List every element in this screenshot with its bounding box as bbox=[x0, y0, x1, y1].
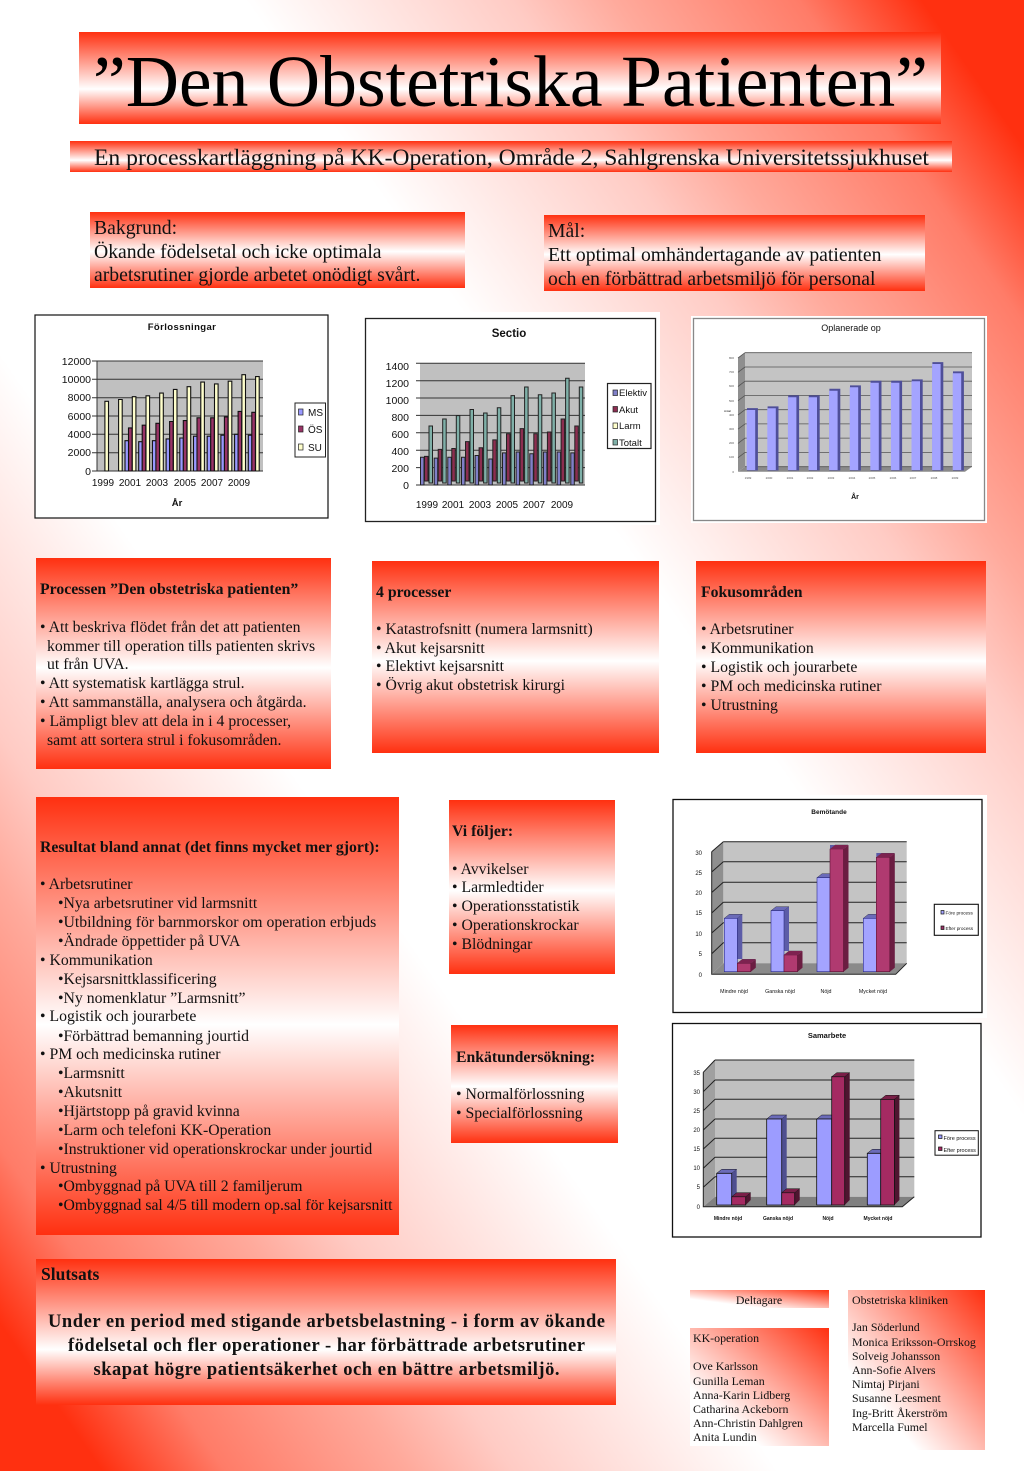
bar chart: Samarbete: 5 bbox=[697, 1185, 701, 1191]
panel: Slutsats: skapat högre patientsäkerhet och en bättre arbetsmiljö. bbox=[94, 1360, 560, 1380]
label: Deltagare: Deltagare bbox=[736, 1293, 782, 1307]
bar chart: Bemötande: 25 bbox=[695, 871, 703, 877]
panel: 4 processer: 4 processer bbox=[376, 584, 451, 601]
bar chart: Oplanerade op: 2004 bbox=[849, 476, 856, 480]
panel: Vi följer: • Blödningar bbox=[452, 936, 533, 953]
bar chart: Sectio: 200 bbox=[391, 463, 409, 475]
bar chart: Oplanerade op: 1999 bbox=[745, 476, 752, 480]
bar chart: Bemötande: 15 bbox=[695, 911, 703, 917]
bar chart: Bemötande: Efter process bbox=[946, 926, 974, 931]
bar chart: Förlossningar: 2003 bbox=[146, 478, 169, 489]
bar chart: Oplanerade op bbox=[691, 316, 987, 523]
bar chart: Bemötande: 5 bbox=[699, 952, 703, 958]
panel: KK-operation: Anita Lundin bbox=[693, 1430, 757, 1444]
panel: Processen: kommer till operation tills patienten skrivs bbox=[47, 638, 315, 655]
bar chart: Bemötande: Ganska nöjd bbox=[765, 989, 795, 995]
bar chart: Samarbete: Samarbete bbox=[808, 1031, 846, 1040]
label: Deltagare bbox=[690, 1290, 829, 1308]
bar chart: Sectio bbox=[358, 312, 660, 525]
panel: Resultat: • PM och medicinska rutiner bbox=[40, 1046, 221, 1063]
bar chart: Samarbete: 10 bbox=[693, 1166, 701, 1172]
panel: Fokusområden: • Arbetsrutiner bbox=[701, 621, 794, 638]
panel: Enkätundersökning: Enkätundersökning: bbox=[456, 1049, 595, 1066]
bar chart: Förlossningar: 0 bbox=[85, 466, 91, 478]
bar chart: Bemötande bbox=[667, 795, 987, 1018]
panel: Resultat: •Kejsarsnittklassificering bbox=[58, 971, 217, 988]
panel: Enkätundersökning: • Normalförlossning bbox=[456, 1086, 585, 1103]
bar chart: Sectio: 2001 bbox=[442, 500, 465, 511]
bar chart: Förlossningar: Förlossningar bbox=[148, 322, 216, 333]
panel: Resultat: •Ändrade öppettider på UVA bbox=[58, 932, 241, 950]
bar chart: Förlossningar: MS bbox=[308, 408, 323, 419]
panel: KK-operation bbox=[690, 1328, 829, 1446]
panel: Resultat: •Hjärtstopp på gravid kvinna bbox=[58, 1103, 240, 1120]
panel: Slutsats: Slutsats bbox=[41, 1264, 100, 1284]
bar chart: Oplanerade op: 2006 bbox=[890, 476, 897, 480]
bar chart: Bemötande: Mycket nöjd bbox=[859, 989, 887, 995]
panel: Fokusområden: • Kommunikation bbox=[701, 640, 814, 657]
panel: KK-operation: Gunilla Leman bbox=[693, 1374, 765, 1388]
bar chart: Sectio: 2005 bbox=[496, 500, 519, 511]
panel: Resultat: •Nya arbetsrutiner vid larmsnitt bbox=[58, 895, 258, 912]
bar chart: Oplanerade op: År bbox=[851, 492, 859, 501]
bar chart: Sectio: 800 bbox=[391, 412, 409, 424]
panel: Processen: • Att beskriva flödet från det att patienten bbox=[40, 619, 301, 636]
bar chart: Samarbete: 35 bbox=[693, 1071, 701, 1077]
bar chart: Förlossningar bbox=[35, 315, 328, 518]
bar chart: Bemötande: 20 bbox=[695, 891, 703, 897]
panel: Resultat: •Instruktioner vid operationskrockar under jourtid bbox=[58, 1141, 372, 1158]
panel: Resultat: • Logistik och jourarbete bbox=[40, 1008, 196, 1025]
panel: Obstetriska kliniken bbox=[848, 1290, 985, 1450]
panel: Obstetriska kliniken: Nimtaj Pirjani bbox=[852, 1377, 920, 1391]
bar chart: Bemötande: Nöjd bbox=[821, 989, 831, 995]
bar chart: Sectio: 600 bbox=[391, 429, 409, 441]
panel: Slutsats: födelsetal och fler operationer - har förbättrade arbetsrutiner bbox=[68, 1336, 585, 1356]
panel: Enkätundersökning: • Specialförlossning bbox=[456, 1105, 583, 1122]
panel: Fokusområden bbox=[696, 561, 986, 753]
bar chart: Oplanerade op: 2001 bbox=[787, 476, 794, 480]
panel: Obstetriska kliniken: Ann-Sofie Alvers bbox=[852, 1363, 936, 1377]
bar chart: Oplanerade op: Oplanerade op bbox=[821, 323, 881, 333]
bar chart: Förlossningar: ÖS bbox=[308, 424, 323, 436]
panel: Vi följer: • Operationsstatistik bbox=[452, 898, 580, 915]
bar chart: Samarbete: Nöjd bbox=[822, 1216, 834, 1222]
bar chart: Förlossningar: 12000 bbox=[62, 356, 91, 368]
bar chart: Bemötande: Mindre nöjd bbox=[720, 989, 748, 995]
bar chart: Sectio: 400 bbox=[391, 446, 409, 458]
panel: KK-operation: Ann-Christin Dahlgren bbox=[693, 1416, 803, 1430]
bar chart: Oplanerade op: 400 bbox=[729, 413, 734, 417]
bar chart: Sectio: 2009 bbox=[551, 500, 574, 511]
panel: Resultat: •Ombyggnad på UVA till 2 familjerum bbox=[58, 1178, 303, 1195]
panel: Mål: Ett optimal omhändertagande av patienten bbox=[548, 244, 882, 266]
bar chart: Samarbete: 0 bbox=[697, 1205, 701, 1211]
bar chart: Förlossningar: 2001 bbox=[119, 478, 142, 489]
bar chart: Oplanerade op: 2007 bbox=[910, 476, 917, 480]
bar chart: Samarbete: 30 bbox=[693, 1090, 701, 1096]
panel: 4 processer bbox=[372, 561, 659, 753]
panel: 4 processer: • Katastrofsnitt (numera larmsnitt) bbox=[376, 621, 593, 638]
panel: Resultat: • Kommunikation bbox=[40, 952, 153, 969]
panel: Resultat: •Ny nomenklatur ”Larmsnitt” bbox=[58, 990, 245, 1007]
bar chart: Oplanerade op: 600 bbox=[729, 384, 734, 388]
bar chart: Bemötande: 0 bbox=[699, 973, 703, 979]
panel: KK-operation: Ove Karlsson bbox=[693, 1359, 758, 1373]
panel: Enkätundersökning bbox=[451, 1025, 618, 1143]
panel: Obstetriska kliniken: Solveig Johansson bbox=[852, 1349, 940, 1363]
bar chart: Bemötande: Bemötande bbox=[811, 809, 847, 816]
bar chart: Oplanerade op: 500 bbox=[729, 399, 734, 403]
panel: Resultat: •Förbättrad bemanning jourtid bbox=[58, 1028, 249, 1045]
panel: KK-operation: Catharina Ackeborn bbox=[693, 1402, 788, 1416]
bar chart: Förlossningar: 6000 bbox=[68, 411, 91, 423]
bar chart: Bemötande: 30 bbox=[695, 851, 703, 857]
bar chart: Förlossningar: 10000 bbox=[62, 374, 91, 386]
panel: Bakgrund: Bakgrund: bbox=[94, 217, 177, 239]
bar chart: Sectio: 1400 bbox=[386, 361, 409, 373]
bar chart: Sectio: 0 bbox=[403, 480, 409, 492]
panel: Resultat: •Utbildning för barnmorskor om operation erbjuds bbox=[58, 914, 376, 931]
panel: Bakgrund bbox=[90, 212, 465, 288]
panel: Processen: • Att sammanställa, analysera och åtgärda. bbox=[40, 694, 307, 711]
bar chart: Oplanerade op: 0 bbox=[732, 470, 734, 474]
panel: Resultat: • Utrustning bbox=[40, 1160, 117, 1177]
bar chart: Sectio: Akut bbox=[619, 405, 638, 416]
bar chart: Oplanerade op: 2003 bbox=[828, 476, 835, 480]
panel: Fokusområden: • PM och medicinska rutiner bbox=[701, 678, 882, 695]
bar chart: Oplanerade op: 2008 bbox=[931, 476, 938, 480]
bar chart: Sectio: 2007 bbox=[523, 500, 546, 511]
title: ”Den Obstetriska Patienten” bbox=[93, 41, 928, 122]
panel: Fokusområden: • Utrustning bbox=[701, 697, 778, 714]
bar chart: Sectio: Elektiv bbox=[619, 388, 647, 399]
bar chart: Oplanerade op: Antal bbox=[724, 409, 731, 413]
panel: Slutsats bbox=[36, 1259, 616, 1405]
panel: Fokusområden: • Logistik och jourarbete bbox=[701, 659, 857, 676]
bar chart: Sectio: 1000 bbox=[386, 395, 409, 407]
panel: Obstetriska kliniken: Monica Eriksson-Orrskog bbox=[852, 1335, 976, 1349]
bar chart: Oplanerade op: 300 bbox=[729, 427, 734, 431]
bar chart: Förlossningar: 4000 bbox=[68, 429, 91, 441]
bar chart: Oplanerade op: 2009 bbox=[952, 476, 959, 480]
bar chart: Förlossningar: 2000 bbox=[68, 447, 91, 459]
bar chart: Förlossningar: SU bbox=[308, 443, 322, 454]
panel: Obstetriska kliniken: Susanne Leesment bbox=[852, 1391, 942, 1405]
panel: Vi följer: Vi följer: bbox=[452, 823, 513, 840]
panel: Processen: samt att sortera strul i fokusområden. bbox=[47, 732, 281, 749]
panel: Processen: • Lämpligt blev att dela in i 4 processer, bbox=[40, 713, 291, 730]
panel: Mål bbox=[544, 215, 925, 291]
bar chart: Förlossningar: 2007 bbox=[201, 478, 224, 489]
panel: KK-operation: KK-operation bbox=[693, 1331, 759, 1345]
panel: 4 processer: • Elektivt kejsarsnitt bbox=[376, 658, 505, 675]
bar chart: Oplanerade op: 2002 bbox=[807, 476, 814, 480]
panel: Vi följer: • Avvikelser bbox=[452, 861, 529, 878]
bar chart: Samarbete: Efter process bbox=[944, 1148, 976, 1154]
bar chart: Samarbete: 15 bbox=[693, 1147, 701, 1153]
bar chart: Sectio: 2003 bbox=[469, 500, 492, 511]
panel: Bakgrund: Ökande födelsetal och icke optimala bbox=[94, 241, 382, 263]
bar chart: Sectio: 1999 bbox=[416, 500, 439, 511]
bar chart: Oplanerade op: 2005 bbox=[869, 476, 876, 480]
bar chart: Oplanerade op: 800 bbox=[729, 356, 734, 360]
subtitle: En processkartläggning på KK-Operation, Område 2, Sahlgrenska Universitetssjukhuset bbox=[94, 145, 930, 170]
bar chart: Förlossningar: 2005 bbox=[174, 478, 197, 489]
panel: Vi följer bbox=[449, 800, 615, 974]
bar chart: Oplanerade op: 100 bbox=[729, 455, 734, 459]
panel: Obstetriska kliniken: Ing-Britt Åkerström bbox=[852, 1406, 948, 1420]
bar chart: Sectio: Totalt bbox=[619, 438, 642, 449]
panel: Resultat: • Arbetsrutiner bbox=[40, 876, 133, 893]
panel: Processen: • Att systematisk kartlägga strul. bbox=[40, 675, 245, 692]
bar chart: Samarbete: 20 bbox=[693, 1128, 701, 1134]
panel: Obstetriska kliniken: Obstetriska kliniken bbox=[852, 1293, 948, 1307]
bar chart: Sectio: Sectio bbox=[492, 328, 526, 340]
panel: Resultat: •Larm och telefoni KK-Operation bbox=[58, 1122, 271, 1139]
bar chart: Samarbete: Mycket nöjd bbox=[864, 1216, 892, 1222]
panel: Resultat: •Ombyggnad sal 4/5 till modern op.sal för kejsarsnitt bbox=[58, 1197, 393, 1214]
bar chart: Samarbete: Före process bbox=[944, 1136, 976, 1142]
bar chart: Samarbete: 25 bbox=[693, 1109, 701, 1115]
bar chart: Bemötande: 10 bbox=[695, 932, 703, 938]
panel: KK-operation: Anna-Karin Lidberg bbox=[693, 1388, 790, 1402]
panel: Slutsats: Under en period med stigande arbetsbelastning - i form av ökande bbox=[48, 1312, 605, 1332]
panel: Resultat: •Akutsnitt bbox=[58, 1084, 123, 1101]
panel: 4 processer: • Övrig akut obstetrisk kirurgi bbox=[376, 676, 566, 694]
panel: 4 processer: • Akut kejsarsnitt bbox=[376, 640, 485, 657]
panel: Obstetriska kliniken: Marcella Fumel bbox=[852, 1420, 928, 1434]
bar chart: Samarbete: Mindre nöjd bbox=[714, 1216, 742, 1222]
panel: Resultat bbox=[36, 797, 399, 1235]
bar chart: Oplanerade op: 200 bbox=[729, 441, 734, 445]
panel: Processen: Processen ”Den obstetriska patienten” bbox=[40, 581, 298, 598]
panel: Processen: ut från UVA. bbox=[47, 656, 129, 673]
panel: Mål: Mål: bbox=[548, 220, 585, 242]
bar chart: Sectio: 1200 bbox=[386, 378, 409, 390]
panel: Mål: och en förbättrad arbetsmiljö för personal bbox=[548, 268, 876, 290]
panel: Obstetriska kliniken: Jan Söderlund bbox=[852, 1320, 920, 1334]
bar chart: Förlossningar: 2009 bbox=[228, 478, 251, 489]
bar chart: Bemötande: Före process bbox=[946, 910, 974, 916]
panel: Resultat: •Larmsnitt bbox=[58, 1065, 125, 1082]
panel: Processen bbox=[36, 558, 331, 769]
bar chart: Samarbete bbox=[672, 1024, 981, 1237]
bar chart: Förlossningar: År bbox=[172, 498, 183, 509]
panel: Bakgrund: arbetsrutiner gjorde arbetet onödigt svårt. bbox=[94, 264, 420, 286]
bar chart: Oplanerade op: 700 bbox=[729, 370, 734, 374]
panel: Resultat: Resultat bland annat (det finns mycket mer gjort): bbox=[40, 839, 380, 856]
bar chart: Oplanerade op: 2000 bbox=[766, 476, 773, 480]
bar chart: Förlossningar: 8000 bbox=[68, 392, 91, 404]
bar chart: Förlossningar: 1999 bbox=[92, 478, 115, 489]
panel: Vi följer: • Larmledtider bbox=[452, 879, 544, 896]
bar chart: Samarbete: Ganska nöjd bbox=[763, 1216, 793, 1222]
panel: Fokusområden: Fokusområden bbox=[701, 584, 803, 601]
bar chart: Sectio: Larm bbox=[619, 421, 641, 432]
panel: Vi följer: • Operationskrockar bbox=[452, 917, 579, 934]
